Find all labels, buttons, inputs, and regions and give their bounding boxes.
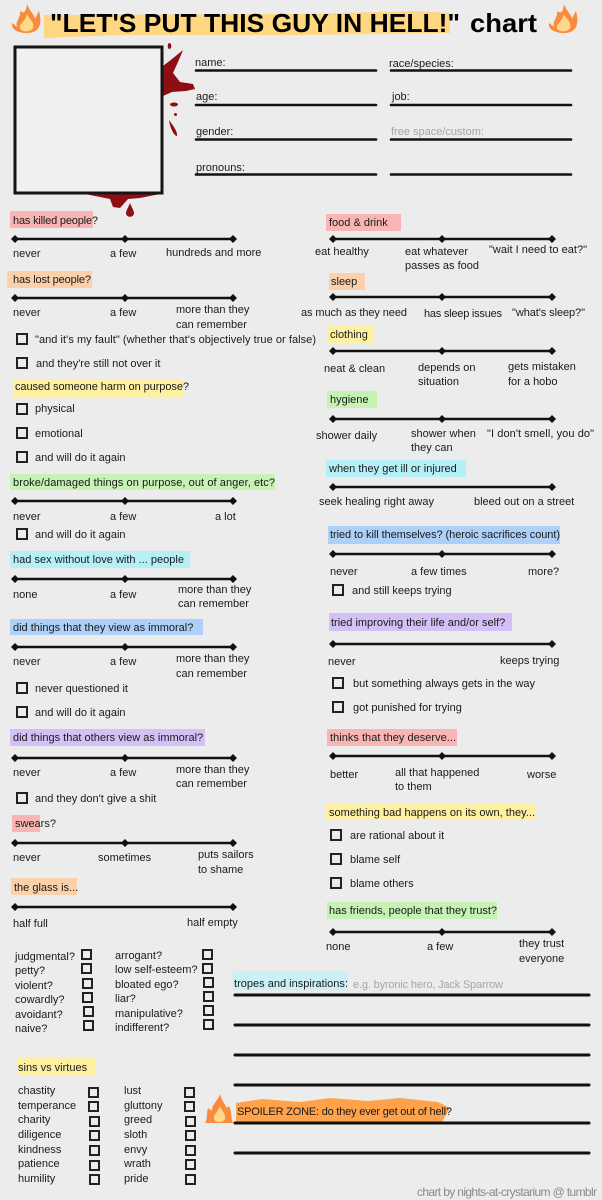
panel: has lost people: never — [13, 307, 41, 319]
panel: sleep: has sleep issues — [424, 308, 502, 320]
panel: the glass: the glass is... — [14, 882, 78, 894]
panel: things others view as immoral: and they don't give a shit — [35, 793, 156, 805]
panel: food and drink: passes as food — [405, 260, 479, 272]
panel: sins vs virtues: greed — [124, 1114, 152, 1126]
panel: sins vs virtues: wrath — [123, 1158, 151, 1170]
panel: swears: swears? — [15, 818, 56, 830]
panel: clothing — [324, 326, 576, 388]
identity fields: race/species: — [389, 58, 454, 70]
panel: hygiene: hygiene — [330, 394, 369, 406]
panel: broke things — [10, 474, 275, 541]
panel: caused harm: and will do it again — [35, 452, 126, 464]
panel: sins vs virtues — [17, 1057, 195, 1185]
panel: something bad happens: blame self — [350, 854, 401, 866]
panel: sins vs virtues: temperance — [18, 1100, 76, 1112]
panel: spoiler zone — [235, 1098, 589, 1153]
panel: hygiene — [316, 391, 594, 454]
panel: ill or injured: bleed out on a street — [474, 496, 574, 508]
panel: traits checklist: manipulative? — [115, 1008, 183, 1020]
credit: chart by nights-at-crystarium @ tumblr — [417, 1185, 597, 1199]
panel: traits checklist — [14, 950, 213, 1035]
panel: something bad happens: blame others — [350, 878, 414, 890]
panel: sins vs virtues: humility — [18, 1173, 56, 1185]
panel: sleep: as much as they need — [301, 307, 407, 319]
panel: tried to kill themselves: a few times — [411, 566, 467, 578]
panel: tried improving — [328, 613, 559, 714]
panel: things others view as immoral: never — [13, 767, 41, 779]
title: chart — [470, 8, 537, 38]
panel: hygiene: shower daily — [316, 430, 378, 442]
panel: thinks they deserve: worse — [526, 769, 556, 781]
panel: ill or injured: seek healing right away — [319, 496, 434, 508]
panel: ill or injured — [319, 460, 574, 508]
panel: has lost people: and they're still not over it — [36, 358, 160, 370]
panel: sins vs virtues: chastity — [18, 1085, 56, 1097]
panel: sex without love: none — [13, 589, 37, 601]
panel: swears — [11, 815, 254, 876]
panel: things they view as immoral: a few — [110, 656, 136, 668]
panel: sex without love — [10, 551, 252, 610]
panel: tried improving: tried improving their life and/or self? — [331, 617, 505, 629]
panel: something bad happens — [326, 803, 535, 890]
panel: tried improving: keeps trying — [500, 655, 559, 667]
panel: food and drink — [315, 214, 587, 272]
panel: broke things: a lot — [215, 511, 236, 523]
panel: traits checklist: liar? — [115, 993, 136, 1005]
panel: hygiene: "I don't smell, you do" — [487, 428, 594, 440]
panel: things they view as immoral: did things that they view as immoral? — [13, 622, 193, 634]
panel: sins vs virtues: kindness — [18, 1144, 62, 1156]
panel: clothing: neat & clean — [324, 363, 385, 375]
panel: ill or injured: when they get ill or injured — [328, 463, 457, 475]
panel: things others view as immoral: more than they — [176, 764, 250, 776]
icon: flame right — [549, 4, 577, 33]
panel: the glass — [11, 878, 238, 930]
panel: something bad happens: something bad happens on its own, they... — [329, 807, 535, 819]
panel: tropes and inspirations: e.g. byronic hero, Jack Sparrow — [353, 979, 503, 991]
portrait frame — [15, 47, 162, 193]
panel: has killed people: a few — [110, 248, 136, 260]
panel: caused harm: caused someone harm on purpose? — [15, 381, 189, 393]
panel: tropes and inspirations: tropes and inspirations: — [234, 978, 348, 990]
panel: has killed people: never — [13, 248, 41, 260]
panel: broke things: never — [13, 511, 41, 523]
panel: has killed people: has killed people? — [13, 215, 98, 227]
panel: hygiene: shower when — [411, 428, 476, 440]
panel: traits checklist: arrogant? — [115, 950, 162, 962]
panel: sins vs virtues: patience — [18, 1158, 60, 1170]
panel: things they view as immoral: more than they — [176, 653, 250, 665]
panel: sins vs virtues: pride — [124, 1173, 148, 1185]
panel: sins vs virtues: sins vs virtues — [18, 1062, 88, 1074]
panel: has friends: none — [326, 941, 350, 953]
panel: food and drink: eat whatever — [405, 246, 468, 258]
panel: traits checklist: cowardly? — [15, 994, 65, 1006]
panel: clothing: clothing — [330, 329, 368, 341]
panel: caused harm: physical — [35, 403, 75, 415]
panel: things they view as immoral: never questioned it — [35, 683, 128, 695]
identity fields: job: — [391, 91, 410, 103]
panel: tried to kill themselves: never — [330, 566, 358, 578]
panel: sins vs virtues: envy — [124, 1144, 148, 1156]
panel: sleep: "what's sleep?" — [512, 307, 585, 319]
panel: traits checklist: judgmental? — [14, 951, 75, 963]
panel: has friends: has friends, people that they trust? — [329, 905, 497, 917]
panel: things others view as immoral: can remember — [176, 778, 247, 790]
panel: things they view as immoral: and will do it again — [35, 707, 126, 719]
identity fields: pronouns: — [196, 162, 245, 174]
panel: food and drink: food & drink — [329, 217, 388, 229]
panel: broke things: and will do it again — [35, 529, 126, 541]
panel: swears: never — [13, 852, 41, 864]
panel: tried to kill themselves: tried to kill themselves? (heroic sacrifices count) — [330, 529, 560, 541]
icon: flame spoiler — [205, 1094, 234, 1123]
panel: hygiene: they can — [411, 442, 453, 454]
panel: thinks they deserve — [327, 729, 556, 793]
panel: sins vs virtues: lust — [124, 1085, 141, 1097]
panel: tried to kill themselves — [328, 526, 560, 597]
panel: has lost people: more than they — [176, 304, 250, 316]
panel: clothing: for a hobo — [508, 376, 558, 388]
panel: things others view as immoral: a few — [110, 767, 136, 779]
identity fields — [195, 57, 571, 174]
panel: has friends: they trust — [519, 938, 564, 950]
panel: sins vs virtues: charity — [18, 1114, 51, 1126]
panel: caused harm — [13, 380, 189, 464]
panel: traits checklist: bloated ego? — [115, 979, 179, 991]
panel: sins vs virtues: sloth — [124, 1129, 147, 1141]
identity fields: free space/custom: — [391, 126, 484, 138]
panel: broke things: broke/damaged things on purpose, out of anger, etc? — [13, 477, 275, 489]
panel: tropes and inspirations — [233, 971, 589, 1085]
panel: has friends: a few — [427, 941, 453, 953]
panel: sex without love: had sex without love with ... people — [13, 554, 184, 566]
panel: caused harm: emotional — [35, 428, 83, 440]
panel: spoiler zone: SPOILER ZONE: do they ever get out of hell? — [237, 1106, 452, 1118]
panel: sleep: sleep — [331, 276, 357, 288]
panel: swears: puts sailors — [198, 849, 254, 861]
panel: things they view as immoral: never — [13, 656, 41, 668]
panel: clothing: depends on — [418, 362, 476, 374]
panel: traits checklist: naive? — [15, 1023, 47, 1035]
identity fields: name: — [195, 57, 226, 69]
panel: broke things: a few — [110, 511, 136, 523]
panel: sleep — [301, 273, 585, 320]
panel: traits checklist: indifferent? — [115, 1022, 169, 1034]
panel: something bad happens: are rational about it — [350, 830, 444, 842]
panel: tried improving: but something always gets in the way — [353, 678, 536, 690]
panel: sex without love: a few — [110, 589, 136, 601]
panel: swears: sometimes — [98, 852, 152, 864]
panel: thinks they deserve: better — [330, 769, 358, 781]
title: "LET'S PUT THIS GUY IN HELL!" — [50, 8, 460, 38]
panel: clothing: situation — [418, 376, 459, 388]
panel: swears: to shame — [198, 864, 243, 876]
panel: sex without love: more than they — [178, 584, 252, 596]
panel: traits checklist: violent? — [15, 980, 53, 992]
panel: the glass: half full — [13, 918, 48, 930]
panel: has friends — [326, 902, 564, 965]
panel: has lost people — [7, 271, 316, 370]
panel: traits checklist: petty? — [15, 965, 45, 977]
panel: tried improving: never — [328, 656, 356, 668]
panel: has killed people: hundreds and more — [166, 247, 261, 259]
panel: has lost people: a few — [110, 307, 136, 319]
panel: sins vs virtues: gluttony — [124, 1100, 163, 1112]
panel: has lost people: can remember — [176, 319, 247, 331]
panel: has lost people: has lost people? — [13, 274, 91, 286]
panel: thinks they deserve: thinks that they deserve... — [330, 732, 456, 744]
panel: thinks they deserve: all that happened — [395, 767, 479, 779]
panel: tried to kill themselves: more? — [528, 566, 559, 578]
panel: traits checklist: low self-esteem? — [115, 964, 198, 976]
panel: food and drink: "wait I need to eat?" — [489, 244, 587, 256]
panel: things they view as immoral — [10, 619, 250, 719]
blood splatter — [85, 43, 195, 217]
panel: traits checklist: avoidant? — [15, 1009, 63, 1021]
panel: has killed people — [10, 211, 261, 260]
panel: tried improving: got punished for trying — [353, 702, 462, 714]
panel: things others view as immoral: did things that others view as immoral? — [13, 732, 203, 744]
panel: things others view as immoral — [10, 729, 250, 805]
panel: has lost people: "and it's my fault" (whether that's objectively true or false) — [35, 334, 316, 346]
panel: tried to kill themselves: and still keeps trying — [352, 585, 452, 597]
panel: sins vs virtues: diligence — [18, 1129, 61, 1141]
panel: sex without love: can remember — [178, 598, 249, 610]
panel: has friends: everyone — [519, 953, 564, 965]
panel: clothing: gets mistaken — [508, 361, 576, 373]
identity fields: gender: — [196, 126, 233, 138]
panel: thinks they deserve: to them — [395, 781, 432, 793]
identity fields: age: — [196, 91, 217, 103]
icon: flame left — [12, 4, 40, 33]
panel: things they view as immoral: can remember — [176, 668, 247, 680]
panel: food and drink: eat healthy — [315, 246, 369, 258]
panel: the glass: half empty — [187, 917, 238, 929]
